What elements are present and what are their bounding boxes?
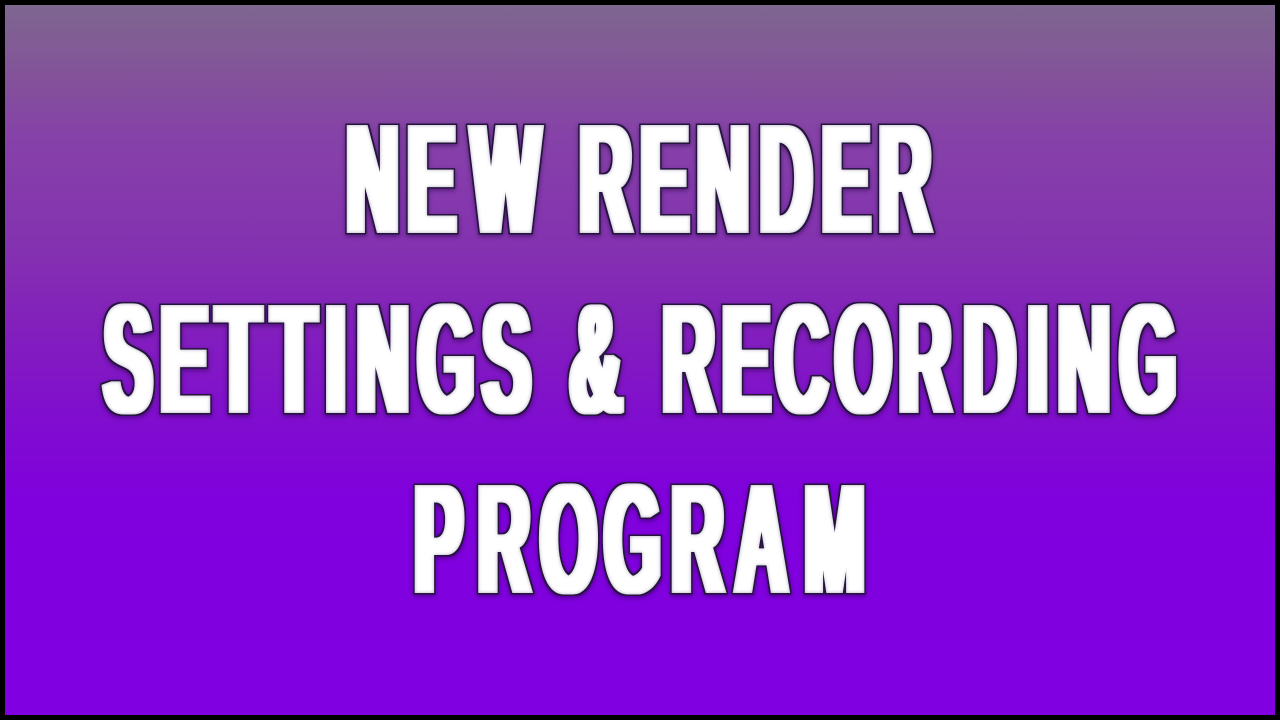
title line 1: NEW [346, 90, 540, 266]
title line 2: SETTINGS [104, 270, 531, 446]
title line 1 [346, 90, 931, 266]
title line 2 [104, 270, 1176, 446]
title line 2: & [570, 270, 622, 446]
title line 2: RECORDING [662, 270, 1176, 446]
title line 3: PROGRAM [414, 450, 865, 626]
title line 1: RENDER [579, 90, 931, 266]
